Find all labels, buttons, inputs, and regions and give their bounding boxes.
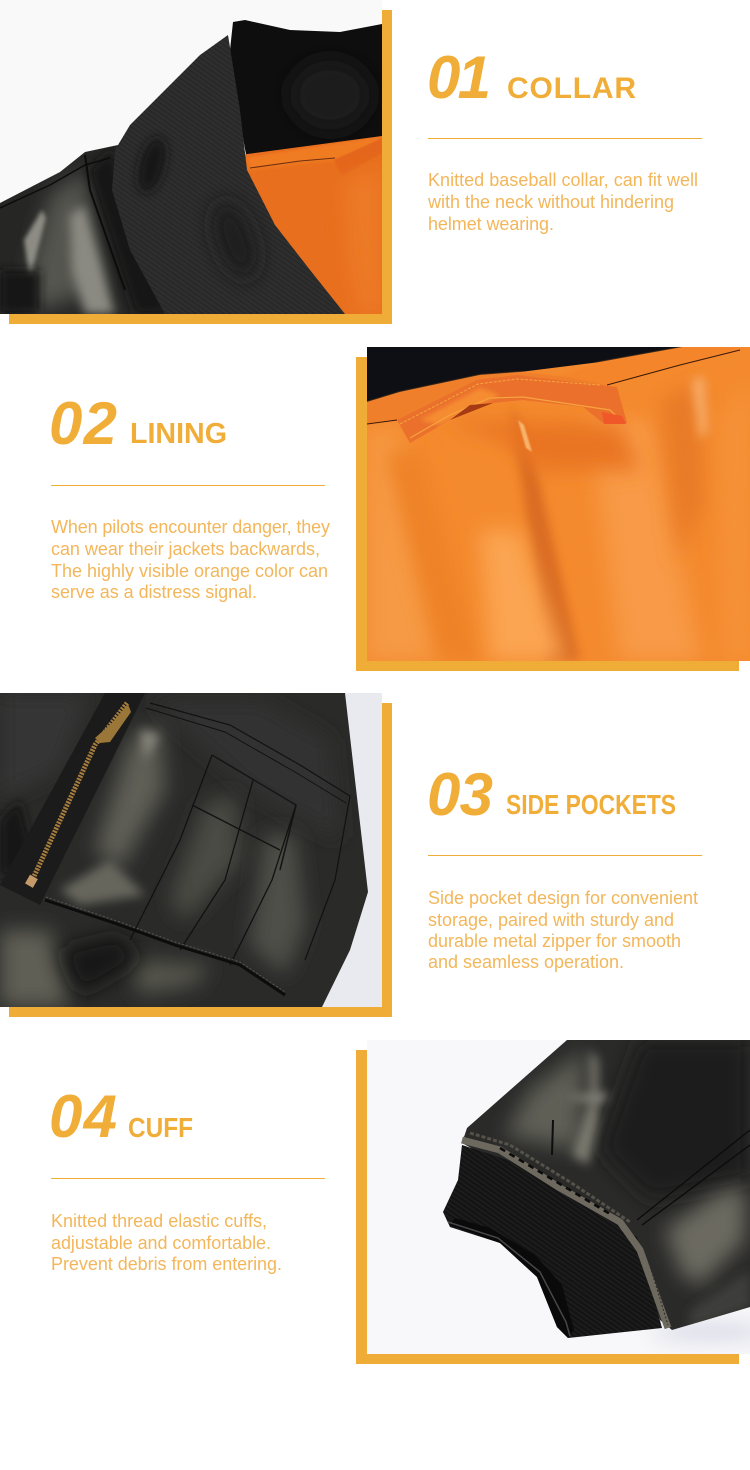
heading: 02 lining: [49, 390, 227, 457]
text: pockets description: storage, paired with sturdy and: [428, 910, 674, 930]
section 02: lining: [49, 347, 750, 671]
text: lining description: The highly visible orange color can: [51, 561, 328, 581]
text: lining description: [51, 517, 330, 602]
text: pockets description: Side pocket design for convenient: [428, 888, 698, 908]
section 01: collar: [0, 0, 702, 324]
text: cuff description: adjustable and comfortable.: [51, 1233, 271, 1253]
gold frame: collar photo: [9, 10, 392, 324]
text: collar description: [427, 170, 698, 234]
text: lining description: can wear their jackets backwards,: [51, 539, 320, 559]
text: pockets description: durable metal zipper for smooth: [428, 931, 681, 951]
photo: knitted collar: [0, 0, 382, 314]
heading: 02 lining: 02: [49, 390, 117, 457]
photo: orange lining: [367, 347, 750, 661]
text: cuff description: Prevent debris from entering.: [51, 1254, 282, 1274]
text: cuff description: [51, 1211, 282, 1274]
text: lining description: serve as a distress signal.: [51, 582, 257, 602]
text: lining description: When pilots encounter danger, they: [51, 517, 330, 537]
heading: 04 cuff: CUFF: [128, 1112, 193, 1143]
gold frame: pockets photo: [9, 703, 392, 1017]
heading: 01 collar: 01: [427, 44, 491, 111]
text: collar description: Knitted baseball collar, can fit well: [428, 170, 698, 190]
heading: 04 cuff: 04: [49, 1083, 117, 1150]
heading: 04 cuff: [49, 1083, 193, 1150]
heading: 01 collar: [427, 44, 636, 111]
photo: knitted cuff: [443, 1040, 750, 1354]
gold frame: cuff photo: [356, 1050, 739, 1364]
heading: 01 collar: COLLAR: [507, 72, 636, 105]
photo: side pocket and zipper: [0, 693, 382, 1007]
heading: 02 lining: LINING: [130, 418, 227, 450]
heading: 03 side pockets: SIDE POCKETS: [506, 789, 676, 820]
text: collar description: helmet wearing.: [428, 214, 554, 234]
gold frame: lining photo: [356, 357, 739, 671]
section 03: side pockets: [0, 693, 702, 1017]
heading: 03 side pockets: [427, 761, 676, 828]
text: pockets description: and seamless operation.: [428, 952, 624, 972]
heading: 03 side pockets: 03: [427, 761, 493, 828]
text: collar description: with the neck without hindering: [427, 192, 674, 212]
text: pockets description: [428, 888, 698, 972]
text: cuff description: Knitted thread elastic cuffs,: [51, 1211, 267, 1231]
section 04: cuff: [49, 1040, 750, 1364]
